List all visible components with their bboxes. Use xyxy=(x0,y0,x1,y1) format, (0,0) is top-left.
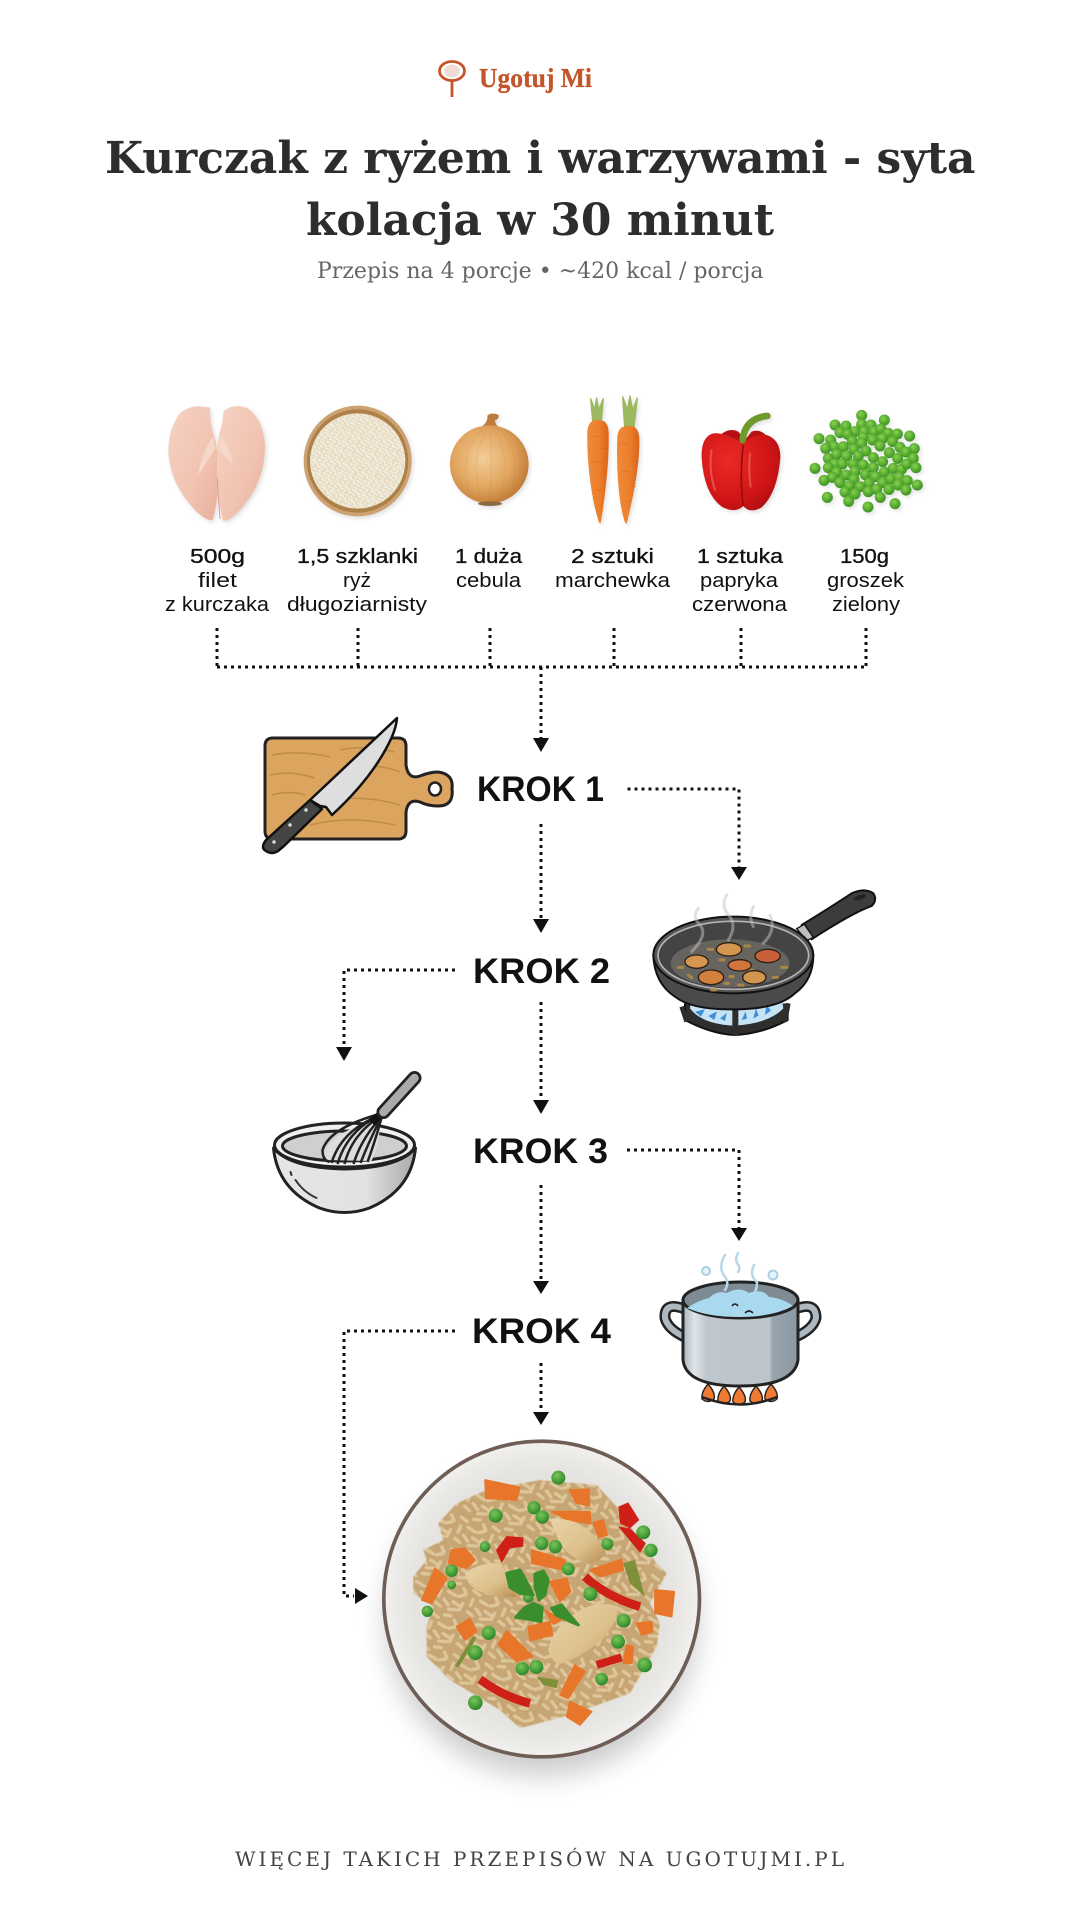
ingredient: onion xyxy=(450,413,529,506)
icon: spoon logo xyxy=(440,62,464,97)
icon: frying pan on burner xyxy=(653,890,875,1036)
label: pepper: papryka xyxy=(700,570,779,592)
red pepper strips xyxy=(480,1502,646,1703)
ingredient: carrots xyxy=(587,396,639,524)
icon: boiling pot xyxy=(665,1253,816,1404)
ingredient: green peas xyxy=(809,410,923,512)
label: onion xyxy=(455,546,523,592)
label: chicken: 500g xyxy=(190,546,245,568)
icon: bowl and whisk xyxy=(274,1078,416,1212)
chicken pieces xyxy=(465,1519,618,1664)
arrow: step 3 to step 4 xyxy=(533,1185,549,1294)
parsley xyxy=(507,1570,578,1625)
step 3 label: KROK 3 xyxy=(473,1132,608,1171)
label: carrot: 2 sztuki xyxy=(571,546,654,568)
step 1 label: KROK 1 xyxy=(477,770,604,809)
label: peas: 150g xyxy=(840,546,889,568)
finished dish: plate of chicken rice xyxy=(382,1439,701,1776)
arrow: step 1 to frying pan xyxy=(628,789,747,880)
arrow: step 4 to plate top xyxy=(533,1363,549,1425)
label: pepper: czerwona xyxy=(692,594,788,616)
label: onion: 1 duża xyxy=(455,546,523,568)
peas xyxy=(422,1471,658,1710)
arrow: step 3 to pot xyxy=(627,1150,747,1241)
title xyxy=(105,133,976,246)
label: rice: 1,5 szklanki xyxy=(297,546,418,568)
label: chicken: z kurczaka xyxy=(165,594,270,616)
ingredient labels xyxy=(165,546,905,616)
label: peas: zielony xyxy=(832,594,900,616)
rice mound xyxy=(413,1480,667,1728)
label: rice xyxy=(287,546,427,616)
icon: cutting board and knife xyxy=(263,718,452,853)
arrow: ingredients merge into step 1 xyxy=(217,628,866,752)
label: pepper: 1 sztuka xyxy=(697,546,784,568)
arrow: step 4 to plate side xyxy=(344,1331,455,1604)
title: Kurczak z ryżem i warzywami - syta xyxy=(105,133,976,184)
carrots xyxy=(422,1480,674,1725)
green pepper strips xyxy=(457,1560,645,1688)
arrow: step 1 to step 2 xyxy=(533,824,549,933)
arrow: step 2 to whisk bowl xyxy=(336,970,455,1061)
label: rice: długoziarnisty xyxy=(287,594,427,616)
label: carrot xyxy=(555,546,671,592)
footer call to action: WIĘCEJ TAKICH PRZEPISÓW NA UGOTUJMI.PL xyxy=(235,1846,844,1871)
label: chicken: filet xyxy=(198,570,238,592)
brand name: Ugotuj Mi xyxy=(479,63,592,93)
label: carrot: marchewka xyxy=(555,570,671,592)
label: peas: groszek xyxy=(827,570,905,592)
label: onion: cebula xyxy=(456,570,522,592)
step 2 label: KROK 2 xyxy=(473,952,610,991)
label: chicken xyxy=(165,546,270,616)
label: rice: ryż xyxy=(343,570,371,592)
ingredient: chicken fillet xyxy=(168,406,265,521)
title: kolacja w 30 minut xyxy=(306,195,775,246)
subtitle: Przepis na 4 porcje • ~420 kcal / porcja xyxy=(317,259,764,284)
logo: Ugotuj Mi xyxy=(440,62,592,97)
label: peas xyxy=(827,546,905,616)
arrow: step 2 to step 3 xyxy=(533,1002,549,1114)
ingredient: red pepper xyxy=(702,416,780,510)
label: pepper xyxy=(692,546,788,616)
ingredient: rice bowl xyxy=(304,406,412,516)
step 4 label: KROK 4 xyxy=(472,1312,612,1351)
